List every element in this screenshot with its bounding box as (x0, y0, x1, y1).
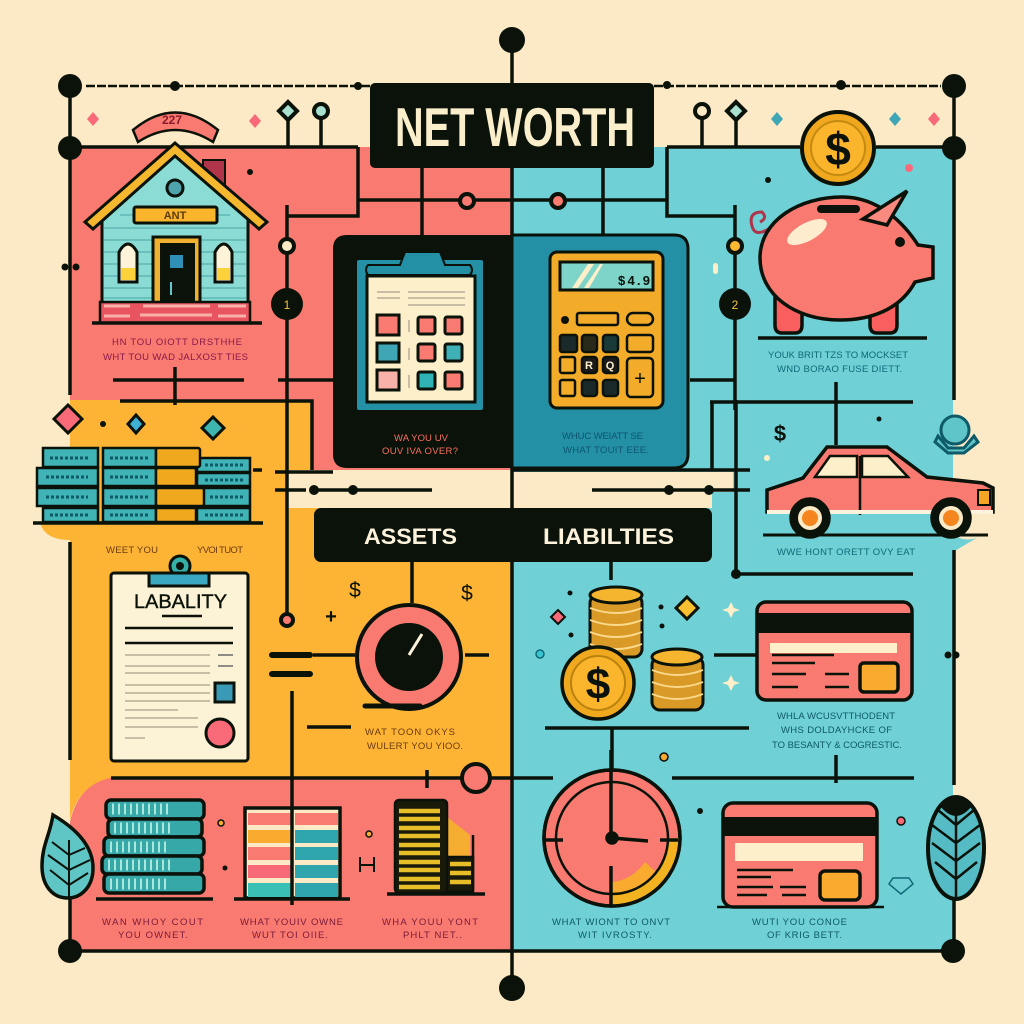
dashed top line (86, 85, 941, 87)
panel: blue right (512, 147, 985, 951)
icon: red circle connector (462, 764, 490, 792)
text: clock caption: WIT IVROSTY. (578, 930, 652, 941)
icon: stacks of cash (33, 448, 263, 523)
icon: coin (800, 110, 876, 186)
icon: house: 227 (162, 113, 182, 127)
node: numbered 2 (719, 288, 751, 320)
text: clock caption: WHAT WIONT TO ONVT (552, 917, 670, 928)
text: house caption: WHT TOU WAD JALXOST TIES (103, 352, 248, 363)
panel: red bottom left (70, 778, 512, 951)
icon: clock (544, 750, 680, 906)
icon: small dollar: $ (774, 421, 786, 446)
text: bottom left captions: WHA YOUU YONT (382, 917, 478, 928)
text: bottom left captions: WHAT YOUIV OWNE (240, 917, 343, 928)
title: NET WORTH (395, 96, 635, 158)
text: piggy caption: YOUK BRITI TZS TO MOCKSET (768, 350, 908, 361)
text: bottom card caption (752, 917, 847, 941)
text: bottom left captions: PHLT NET.. (403, 930, 462, 941)
text: bottom left captions (102, 917, 478, 941)
node: numbered 2: 2 (732, 298, 739, 312)
assets liabilities label bar: LIABILTIES (543, 524, 674, 549)
icon: credit card top (757, 602, 912, 700)
panel: calculator teal (512, 235, 688, 468)
icon: gauge: $ (461, 582, 473, 605)
icon: clipboard liability: LABALITY (134, 592, 227, 613)
title (370, 83, 654, 168)
panel: clipboard dark: WA YOU UV (394, 433, 449, 444)
node: numbered 1: 1 (284, 298, 291, 312)
panel: yellow left middle (40, 400, 512, 820)
icon: gauge: $ (349, 579, 361, 602)
text: house caption (103, 337, 248, 363)
text: gauge caption: WULERT YOU YIOO. (367, 741, 463, 752)
icon: gauge: + (325, 606, 337, 628)
icon: coin stacks (562, 587, 703, 719)
assets liabilities label bar (314, 508, 712, 562)
decorative diamonds (87, 112, 940, 172)
icon: coin: $ (825, 123, 851, 175)
text: piggy caption: WND BORAO FUSE DIETT. (777, 364, 902, 375)
icon: leaf left (42, 815, 93, 898)
text: car caption: WWE HONT ORETT OVY EAT (777, 547, 915, 558)
text: bottom left captions: YOU OWNET. (118, 930, 188, 941)
icon: car (763, 447, 993, 537)
panel: calculator teal: WHAT TOUIT EEE. (563, 445, 649, 456)
text: clock caption (552, 917, 670, 941)
icon: coin stack teal (96, 800, 213, 899)
assets liabilities label bar: ASSETS (364, 524, 457, 549)
icon: leaf right (928, 797, 984, 900)
text: cash caption: WEET YOU (106, 545, 158, 556)
panel: clipboard dark (333, 235, 512, 468)
panel: red top left (70, 147, 512, 470)
panel: calculator teal: R (585, 360, 593, 372)
text: house caption: HN TOU OIOTT DRSTHHE (112, 337, 242, 348)
panel: calculator teal: + (634, 368, 646, 390)
decorative shapes (54, 112, 913, 894)
panel: calculator teal: $4.9 (618, 273, 650, 288)
text: card caption (772, 711, 902, 751)
text: card caption: TO BESANTY & COGRESTIC. (772, 740, 902, 751)
panel: calculator teal: WHUC WEIATT SE (562, 431, 643, 442)
text: piggy caption (768, 350, 908, 375)
text: card caption: WHS DOLDAYHCKE OF (781, 725, 892, 736)
text: bottom card caption: OF KRIG BETT. (767, 930, 842, 941)
text: bottom card caption: WUTI YOU CONOE (752, 917, 847, 928)
text: cash caption: YVOI TUOT (197, 545, 243, 556)
icon: coin stacks: $ (586, 660, 610, 709)
rings on lines (279, 102, 745, 626)
panel: clipboard dark: OUV IVA OVER? (382, 446, 458, 457)
icon: colored notes stack (234, 778, 350, 905)
icon: small face (935, 416, 978, 453)
text: gauge caption (365, 727, 463, 752)
text: bottom left captions: WUT TOI OIIE. (252, 930, 328, 941)
panel: calculator teal: Q (606, 360, 615, 372)
node: numbered 1 (271, 288, 303, 320)
icon: house (85, 112, 267, 323)
icon: house: ANT (164, 210, 187, 222)
text: gauge caption: WAT TOON OKYS (365, 727, 455, 738)
connector lines (70, 40, 954, 988)
icon: gauge (325, 579, 473, 709)
text: cash caption (106, 545, 243, 556)
text: card caption: WHLA WCUSVTTHODENT (777, 711, 895, 722)
text: bottom left captions: WAN WHOY COUT (102, 917, 203, 928)
icon: clipboard liability (111, 556, 248, 761)
icon: gold coin stacks (360, 800, 485, 894)
icon: piggy bank (751, 191, 933, 338)
panel: cream centre band (288, 472, 733, 508)
icon: credit card bottom (717, 803, 884, 907)
